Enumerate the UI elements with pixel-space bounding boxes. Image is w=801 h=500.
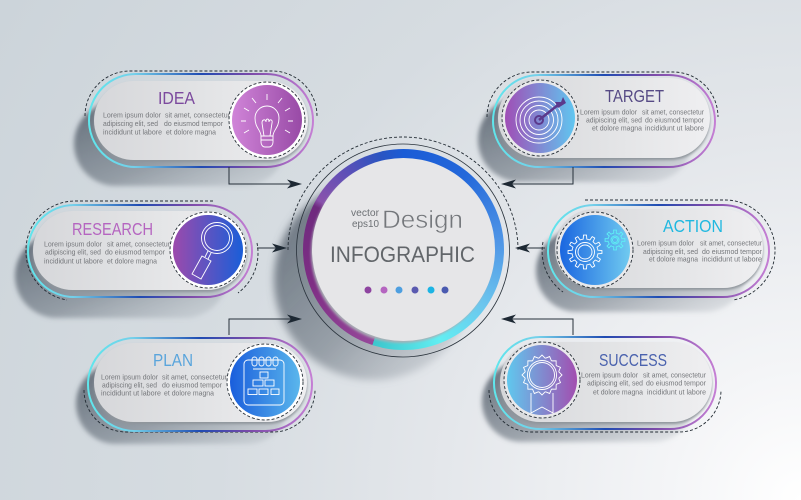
- icon: light bulb: [241, 94, 293, 147]
- body text: incididunt ut labore: [647, 388, 706, 396]
- body text: Lorem ipsum dolor: [637, 238, 695, 248]
- heading: vector eps10: vector: [351, 207, 379, 219]
- coloured dots: [364, 286, 448, 294]
- title: IDEA: [158, 88, 195, 108]
- title: PLAN: [153, 350, 193, 370]
- card: IDEA: [74, 71, 317, 186]
- body text: do eiusmod tempor: [702, 247, 763, 256]
- arrow: ACTION to centre: [515, 244, 545, 252]
- body text: do eiusmod tempor: [162, 380, 223, 390]
- body text: et dolore magna: [649, 254, 699, 264]
- arrow: PLAN to centre: [229, 314, 302, 335]
- body text: do eiusmod tempor: [645, 116, 705, 124]
- icon: gears: [568, 230, 625, 269]
- body text: [103, 110, 231, 136]
- body text: [580, 108, 705, 132]
- body text: incididunt ut labore: [101, 388, 161, 398]
- body text: [637, 238, 763, 264]
- body text: adipiscing elit, sed: [643, 247, 698, 256]
- body text: adipiscing elit, sed: [45, 248, 101, 256]
- title: RESEARCH: [72, 219, 153, 239]
- title: SUCCESS: [599, 350, 667, 370]
- card: RESEARCH: [15, 201, 258, 318]
- central coloured ring: [303, 149, 504, 350]
- body text: sit amet, consectetur: [642, 108, 705, 116]
- body text: et dolore magna: [107, 256, 158, 266]
- arrow: IDEA to centre: [229, 167, 302, 188]
- heading: INFOGRAPHIC: INFOGRAPHIC: [330, 242, 475, 267]
- icon: notepad with org chart: [244, 357, 284, 405]
- body text: adipiscing elit, sed: [586, 116, 642, 124]
- body text: adipiscing elit, sed: [103, 119, 158, 128]
- body text: [101, 372, 228, 398]
- card: PLAN: [76, 338, 315, 444]
- body text: Lorem ipsum dolor: [103, 110, 162, 120]
- body text: sit amet, consectetur: [165, 110, 231, 120]
- body text: sit amet, consectetur: [700, 238, 763, 248]
- body text: et dolore magna: [166, 128, 217, 136]
- body text: incididunt ut labore: [702, 254, 762, 264]
- central circle shadow: [274, 180, 474, 380]
- heading: vector eps10: eps10: [352, 218, 379, 230]
- title: TARGET: [605, 86, 664, 106]
- body text: sit amet, consectetur: [162, 372, 228, 382]
- body text: adipiscing elit, sed: [587, 378, 643, 388]
- body text: adipiscing elit, sed: [102, 380, 157, 390]
- heading: Design: Design: [382, 206, 463, 234]
- body text: incididunt ut labore: [645, 124, 704, 132]
- body text: Lorem ipsum dolor: [581, 370, 639, 380]
- body text: do eiusmod tempor: [164, 119, 224, 128]
- card: TARGET: [478, 72, 718, 182]
- arrow: TARGET to centre: [501, 167, 573, 188]
- arrow: RESEARCH to centre: [257, 244, 287, 252]
- body text: do eiusmod tempor: [646, 378, 707, 388]
- body text: Lorem ipsum dolor: [580, 108, 638, 116]
- central badge: [288, 137, 518, 357]
- icon: target with arrow: [516, 97, 566, 143]
- icon: award ribbon: [522, 355, 562, 413]
- body text: sit amet, consectetur: [107, 240, 171, 248]
- card: SUCCESS: [482, 337, 721, 442]
- body text: [44, 240, 171, 266]
- icon: magnifying glass: [192, 222, 232, 279]
- body text: et dolore magna: [592, 124, 643, 132]
- body text: incididunt ut labore: [103, 128, 162, 136]
- body text: Lorem ipsum dolor: [44, 240, 103, 248]
- body text: [581, 370, 707, 396]
- body text: Lorem ipsum dolor: [101, 372, 159, 382]
- title: ACTION: [663, 216, 723, 236]
- body text: et dolore magna: [593, 388, 644, 396]
- card: ACTION: [536, 200, 775, 312]
- heading: vector eps10: [351, 207, 379, 230]
- body text: et dolore magna: [164, 388, 215, 398]
- arrow: SUCCESS to centre: [501, 314, 573, 335]
- body text: do eiusmod tempor: [105, 248, 166, 256]
- body text: incididunt ut labore: [44, 256, 103, 266]
- body text: sit amet, consectetur: [643, 370, 707, 380]
